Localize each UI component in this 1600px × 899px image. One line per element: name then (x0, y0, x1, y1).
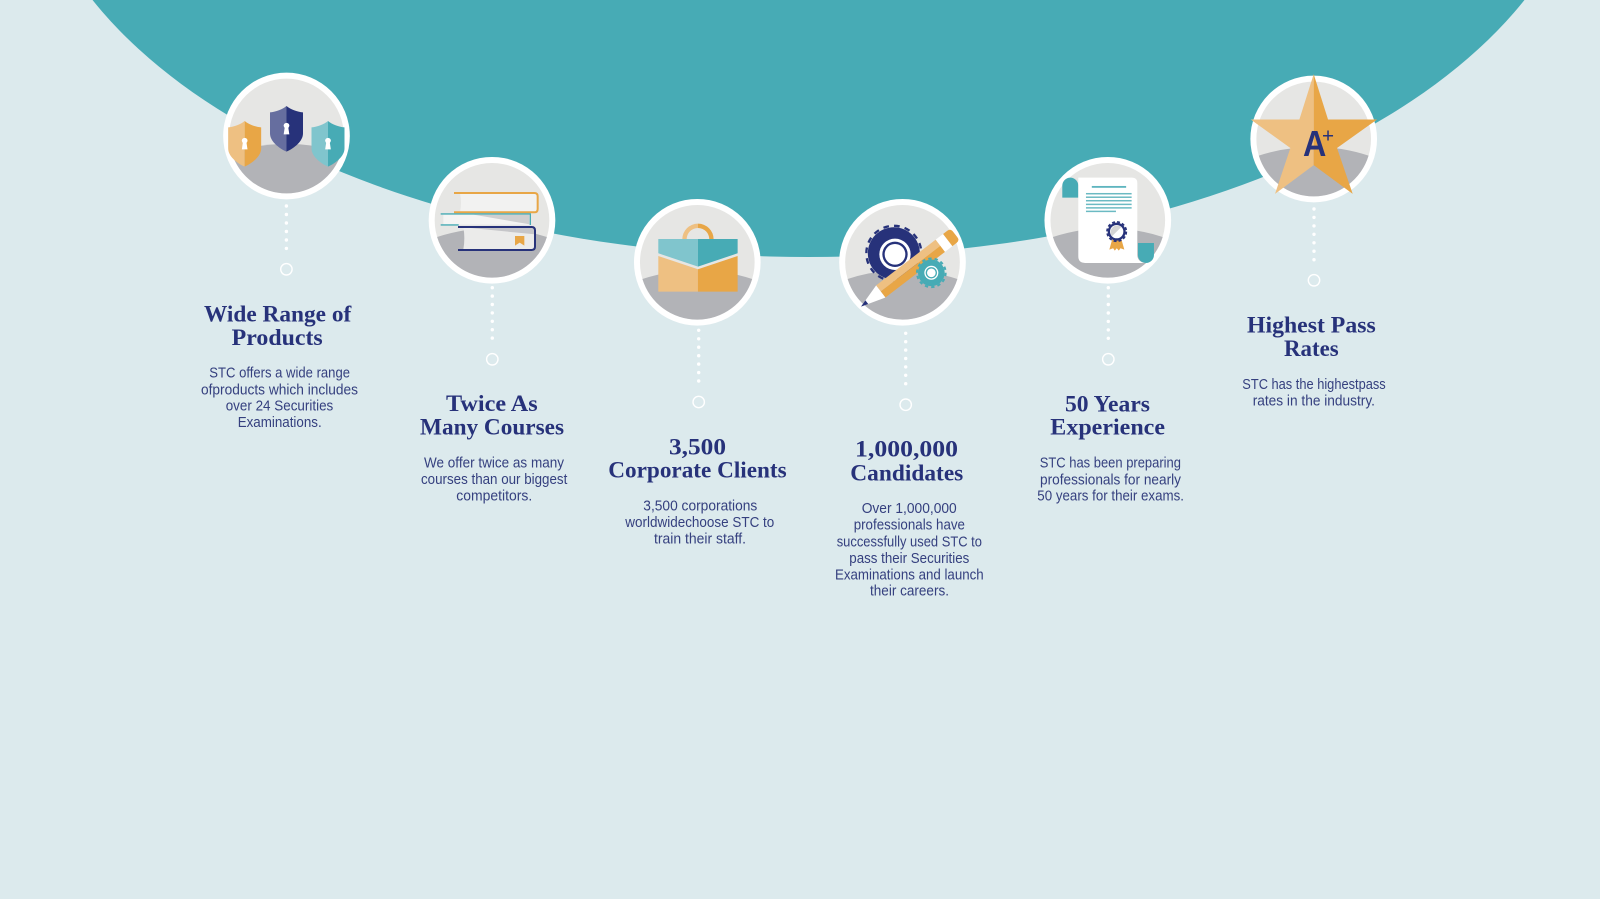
heading: Corporate Clients (608, 458, 787, 484)
text block: worldwidechoose STC to (624, 515, 774, 531)
panel: highest pass rates (1242, 74, 1386, 410)
heading: Wide Range of (204, 302, 352, 328)
text block: Over 1,000,000 (862, 501, 957, 517)
heading: Rates (1284, 336, 1339, 362)
connector dots and ring (693, 329, 704, 408)
text block: competitors. (456, 488, 532, 504)
connector dots and ring (1308, 207, 1320, 286)
heading: 50 Years (1065, 391, 1150, 417)
text block (835, 501, 984, 600)
heading (1247, 313, 1376, 362)
teal arc background (28, 0, 1590, 257)
text block: We offer twice as many (424, 455, 565, 471)
icon: A+ star: A (1303, 123, 1326, 164)
text block: professionals have (854, 518, 965, 534)
connector dots and ring (487, 286, 498, 365)
text block: their careers. (870, 584, 949, 600)
text block (201, 366, 358, 431)
connector dots and ring (281, 204, 292, 275)
panel: candidates (835, 199, 984, 600)
icon: briefcase (634, 199, 761, 326)
text block: professionals for nearly (1040, 472, 1182, 488)
text block (1242, 377, 1386, 410)
text block: train their staff. (654, 531, 746, 547)
text block (421, 455, 567, 504)
text block: ofproducts which includes (201, 382, 358, 398)
text block: over 24 Securities (226, 399, 333, 415)
text block: 3,500 corporations (643, 498, 757, 514)
heading: Experience (1050, 415, 1165, 441)
heading: Many Courses (420, 414, 564, 440)
text block: Examinations. (238, 415, 322, 431)
text block: pass their Securities (849, 551, 969, 567)
icon: stack of books (429, 157, 555, 284)
text block: successfully used STC to (837, 534, 982, 550)
text block: 50 years for their exams. (1037, 489, 1184, 505)
text block (624, 498, 774, 547)
text block: STC has been preparing (1040, 456, 1181, 472)
heading: Candidates (850, 460, 963, 486)
icon: three shields (223, 73, 350, 199)
heading (1050, 391, 1165, 441)
heading (420, 391, 564, 440)
icon: A+ star: + (1322, 124, 1334, 147)
icon: certificate scroll (1044, 157, 1171, 284)
heading (608, 434, 787, 484)
heading: Highest Pass (1247, 313, 1376, 339)
heading (204, 302, 352, 351)
icon: A+ star (1250, 74, 1377, 202)
text block: courses than our biggest (421, 472, 567, 488)
connector dots and ring (900, 332, 911, 410)
panel: twice as many courses (420, 157, 567, 504)
heading: 1,000,000 (855, 437, 958, 463)
heading: Products (232, 325, 323, 351)
text block: STC offers a wide range (209, 366, 350, 382)
connector dots and ring (1103, 286, 1114, 365)
heading: 3,500 (669, 434, 726, 460)
panel: years experience (1037, 157, 1184, 505)
text block: STC has the highestpass (1242, 377, 1386, 393)
text block (1037, 456, 1184, 505)
text block: Examinations and launch (835, 567, 984, 583)
heading (850, 437, 963, 486)
icon: gears and pencil (839, 199, 966, 326)
heading: Twice As (446, 391, 538, 417)
text block: rates in the industry. (1253, 394, 1375, 410)
panel: corporate clients (608, 199, 787, 547)
panel: wide range of products (201, 73, 358, 431)
